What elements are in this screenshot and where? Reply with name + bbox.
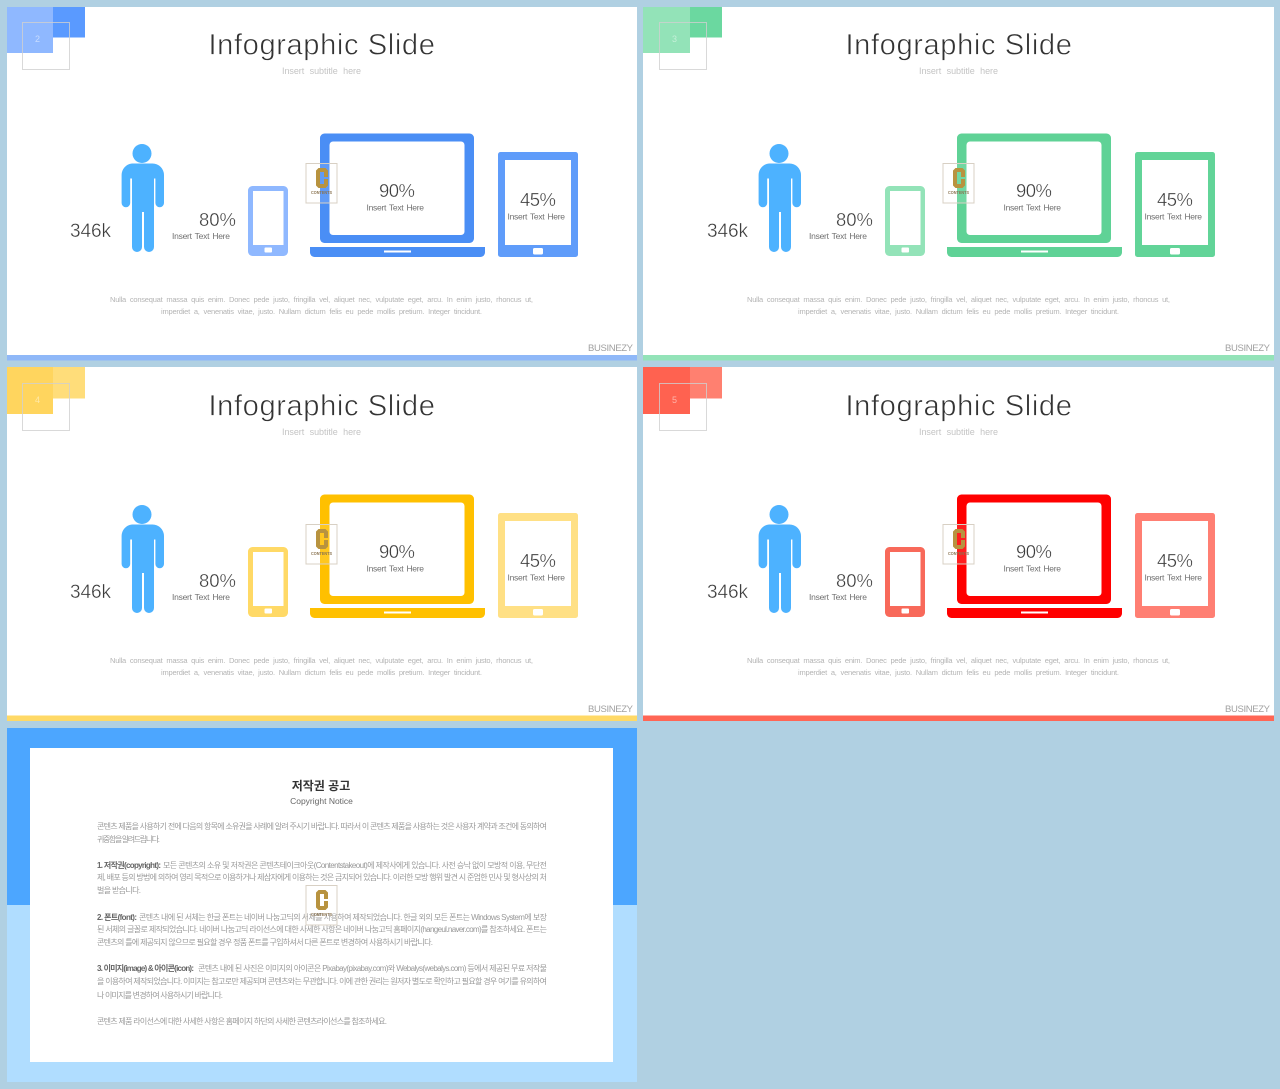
heading: copyright notice [290, 778, 353, 806]
stat: 90%: Insert Text Here [1004, 564, 1061, 574]
stat: 90%: 90% [379, 541, 415, 562]
brand: BUSINEZY [588, 343, 634, 354]
stat: 80% [809, 570, 873, 602]
text block: introduction [97, 821, 547, 844]
text block: section 3: 콘텐츠 내에 된 사진은 이미지의 아이콘은 Pixabay(pixabay.com)와 Webalys(webalys.com) 등에서 제공된 무료 저작물 [198, 963, 547, 973]
title: Infographic Slide [846, 390, 1072, 422]
text block: imperdiet a, venenatis vitae, justo. Nullam dictum felis eu pede mollis pretium. Integer tincidunt. [798, 307, 1119, 316]
text block: Nulla consequat massa quis enim. Donec pede justo, fringilla vel, aliquet nec, vulputate eget, arcu. In enim justo, rhoncus ut, [110, 656, 533, 665]
watermark: CONTENTS [948, 551, 969, 556]
icon: person [122, 144, 164, 252]
stat: 80%: Insert Text Here [172, 592, 230, 602]
stat: 90%: 90% [1016, 180, 1052, 201]
stat: 45% [508, 550, 565, 582]
heading: copyright notice: Copyright Notice [290, 796, 353, 806]
text block: introduction: 콘텐츠 제품을 사용하기 전에 다음의 항목에 소유권을 사례에 알려 주시기 바랍니다. 따라서 이 콘텐츠 제품을 사용하는 것은 사용자 계약과 조건에 동의하여 [97, 821, 547, 831]
watermark [306, 164, 337, 203]
stat: 90% [1004, 180, 1061, 212]
stat: 80% [809, 209, 873, 241]
watermark [306, 524, 337, 564]
icon: corner squares [643, 367, 722, 430]
watermark: CONTENTS [311, 551, 332, 556]
text block: section 2 [97, 912, 548, 947]
panel: blue slide [7, 7, 637, 360]
panel: copyright notice [7, 728, 637, 1082]
text block: section 3: 3. 이미지(image) & 아이콘(icon): [97, 963, 194, 973]
stat: 346k: 346k [70, 221, 112, 242]
stat: 90% [366, 541, 424, 574]
text block: section 1: 1. 저작권(copyright): [97, 860, 161, 870]
panel: green slide [643, 7, 1274, 360]
watermark [306, 886, 337, 925]
icon: corner squares [7, 367, 85, 430]
stat: 45% [508, 189, 565, 222]
icon: corner squares: 4 [35, 395, 40, 405]
watermark [943, 164, 974, 203]
brand: BUSINEZY [1225, 704, 1271, 715]
icon: corner squares: 5 [672, 395, 677, 405]
stat: 80%: 80% [199, 570, 236, 591]
brand: BUSINEZY [1225, 343, 1271, 354]
icon: laptop [947, 494, 1122, 618]
icon: corner squares [643, 7, 722, 70]
subtitle: Insert subtitle here [282, 427, 361, 437]
text block [110, 295, 533, 316]
stat: 90%: Insert Text Here [366, 564, 424, 574]
text block: Nulla consequat massa quis enim. Donec pede justo, fringilla vel, aliquet nec, vulputate eget, arcu. In enim justo, rhoncus ut, [110, 295, 533, 304]
stat: 80% [172, 570, 236, 602]
icon: tablet [498, 152, 578, 257]
icon: laptop [310, 494, 485, 618]
subtitle: Insert subtitle here [919, 66, 998, 76]
icon: corner squares: 2 [35, 34, 40, 44]
text block: closing note: 콘텐츠 제품 라이선스에 대한 사세한 사항은 홈페이지 하단의 사세한 콘텐츠라이선스를 참조하세요. [97, 1016, 387, 1026]
brand: BUSINEZY [588, 704, 634, 715]
stat: 80%: 80% [836, 209, 873, 230]
heading: copyright notice: 저작권 공고 [292, 778, 350, 793]
text block: section 2: 콘텐츠의 틀에 제공되지 않으므로 필요할 경우 정품 폰트를 구입하셔서 다른 폰트로 변경하여 사용하시기 바랍니다. [97, 937, 433, 947]
text block: section 3: 나 이미지를 변경하여 사용하시기 바랍니다. [97, 990, 223, 1000]
icon: tablet [1135, 152, 1215, 257]
title: Infographic Slide [208, 390, 436, 422]
text block: section 2: 된 서체의 글꼴로 제작되었습니다. 네이버 나눔고딕 라이선스에 대한 사세한 사항은 네이버 나눔고딕 홈페이지(hangeul.naver.com)를 참조하세요. 폰트는 [97, 924, 547, 934]
icon: laptop [310, 134, 485, 257]
icon: person [122, 505, 164, 613]
stat: 80%: Insert Text Here [172, 231, 230, 241]
stat: 90%: Insert Text Here [1004, 202, 1061, 212]
stat: 45%: Insert Text Here [1144, 572, 1202, 582]
title: Infographic Slide [846, 28, 1072, 62]
icon: phone [248, 547, 288, 617]
watermark: CONTENTS [311, 190, 332, 195]
text block: section 3 [97, 963, 547, 1000]
text block: introduction: 귀중함을 알려드립니다. [97, 834, 160, 844]
text block [747, 656, 1170, 677]
watermark [943, 524, 974, 564]
icon: person [759, 505, 801, 613]
icon: phone [885, 186, 925, 256]
icon: person [759, 144, 801, 252]
stat: 45%: 45% [1157, 189, 1193, 210]
subtitle: Insert subtitle here [282, 66, 361, 76]
stat: 80%: 80% [836, 570, 873, 591]
text block: section 2: 2. 폰트(font): [97, 913, 137, 922]
icon: phone [248, 186, 288, 256]
stat: 346k: 346k [707, 582, 748, 603]
stat: 90%: Insert Text Here [366, 202, 424, 212]
stat: 80%: 80% [199, 209, 236, 230]
stat: 90%: 90% [379, 180, 415, 201]
text block: imperdiet a, venenatis vitae, justo. Nullam dictum felis eu pede mollis pretium. Integer tincidunt. [161, 668, 482, 677]
icon: tablet [498, 513, 578, 618]
text block: section 2: 콘텐츠 내에 된 서체는 한글 폰트는 네이버 나눔고딕의 서체를 사용하여 제작되었습니다. 한글 외의 모든 폰트는 Windows System에 보장 [139, 912, 548, 922]
subtitle: Insert subtitle here [919, 427, 998, 437]
text block: Nulla consequat massa quis enim. Donec pede justo, fringilla vel, aliquet nec, vulputate eget, arcu. In enim justo, rhoncus ut, [747, 295, 1170, 304]
stat: 45%: Insert Text Here [1144, 212, 1202, 222]
text block: section 1 [97, 860, 547, 895]
text block: imperdiet a, venenatis vitae, justo. Nullam dictum felis eu pede mollis pretium. Integer tincidunt. [161, 307, 482, 316]
stat: 90% [366, 180, 424, 212]
text block: section 1: 제, 배포 등의 방법에 의하여 영리 목적으로 이용하거나 제삼자에게 이용하는 것은 금지되어 있습니다. 이러한 모방 행위 발견 시 준엄한 민사 및 형사상의 처 [97, 872, 547, 882]
stat: 45%: 45% [520, 189, 556, 210]
stat: 45%: 45% [520, 550, 556, 571]
stat: 45% [1144, 189, 1202, 222]
text block: section 1: 모든 콘텐츠의 소유 및 저작권은 콘텐츠테이크아웃(Contentstakeout)에 제작사에게 있습니다. 사전 승낙 없이 모방적 이용, 무단전 [163, 860, 547, 870]
icon: tablet [1135, 513, 1215, 618]
stat: 346k: 346k [70, 582, 112, 603]
watermark: CONTENTS [948, 190, 969, 195]
stat: 80%: Insert Text Here [809, 592, 867, 602]
stat: 80%: Insert Text Here [809, 231, 867, 241]
icon: corner squares [7, 7, 85, 70]
title: Infographic Slide [208, 28, 436, 62]
panel: red slide [643, 367, 1274, 721]
stat: 80% [172, 209, 236, 241]
text block: section 3: 을 이용하여 제작되었습니다. 이미지는 참고로만 제공되며 콘텐츠와는 무관합니다. 이에 관한 권리는 원저자 별도로 확인하고 필요할 경우 여기를 유의하여 [97, 976, 547, 986]
stat: 346k: 346k [707, 221, 748, 242]
text block: Nulla consequat massa quis enim. Donec pede justo, fringilla vel, aliquet nec, vulputate eget, arcu. In enim justo, rhoncus ut, [747, 656, 1170, 665]
watermark: CONTENTS [311, 912, 332, 917]
text block [747, 295, 1170, 316]
stat: 90% [1004, 541, 1061, 574]
stat: 90%: 90% [1016, 541, 1052, 562]
icon: laptop [947, 134, 1122, 257]
text block [110, 656, 533, 677]
icon: phone [885, 547, 925, 617]
stat: 45%: Insert Text Here [508, 572, 565, 582]
panel: yellow slide [7, 367, 637, 721]
stat: 45%: Insert Text Here [508, 212, 565, 222]
text block: imperdiet a, venenatis vitae, justo. Nullam dictum felis eu pede mollis pretium. Integer tincidunt. [798, 668, 1119, 677]
stat: 45%: 45% [1157, 550, 1193, 571]
text block: section 1: 벌을 받습니다. [97, 885, 141, 895]
icon: corner squares: 3 [672, 34, 677, 44]
stat: 45% [1144, 550, 1202, 582]
